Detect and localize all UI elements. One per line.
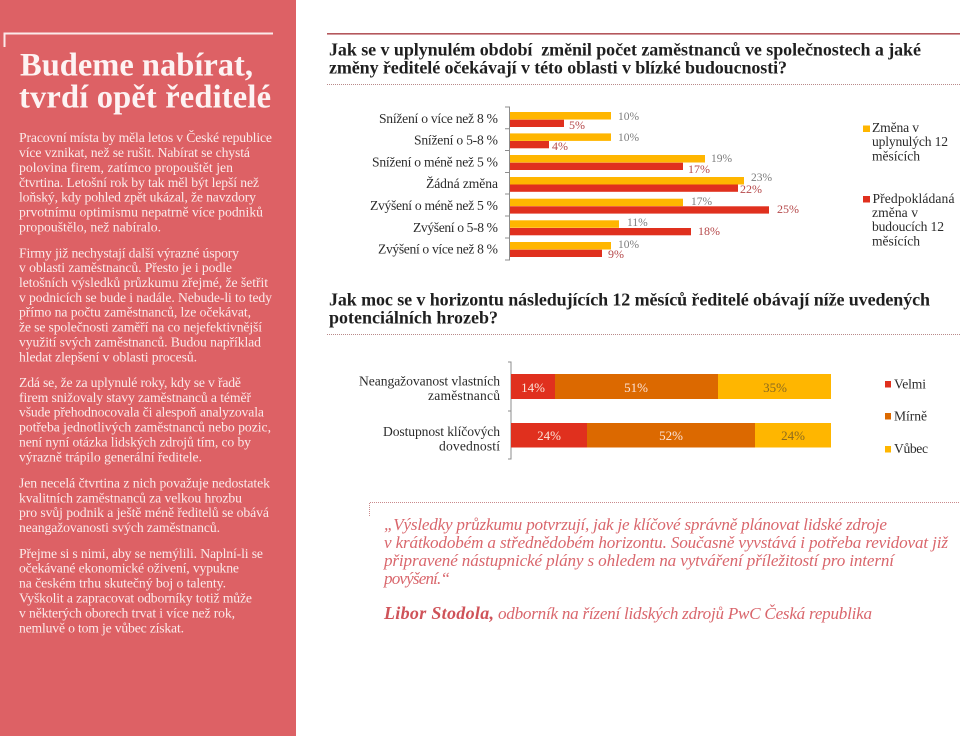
legend: change chart: Předpokládaná (872, 191, 954, 206)
chart axis (508, 362, 511, 459)
bar: dostupnost: 52% (659, 428, 683, 443)
panel: left article column (0, 0, 296, 736)
heading: change in number of employees (327, 33, 960, 84)
heading: change in number of employees: změny ředitelé očekávají v této oblasti v blízké budoucnosti? (329, 58, 787, 78)
value labels: next 12 months: 22% (740, 182, 762, 196)
category labels: Žádná změna (426, 175, 498, 191)
red bars: next 12 months (510, 120, 769, 257)
quote text: „Výsledky průzkumu potvrzují, jak je klíčové správně plánovat lidské zdroje (384, 515, 887, 534)
legend: change chart: změna v (872, 205, 918, 220)
heading: perceived threats (327, 290, 960, 334)
category labels (370, 111, 498, 256)
text block: paragraph 3: všude přehodnocovala či alespoň analyzovala (19, 404, 264, 420)
text block: paragraph 4: neangažovanosti svých zaměstnanců. (19, 520, 220, 535)
callout: expert quote (370, 502, 960, 623)
text block: paragraph 5: na českém trhu skutečný boj o talenty. (19, 576, 226, 590)
text block: paragraph 1 (19, 129, 272, 234)
text block: paragraph 5: Vyškolit a zapracovat odborníky totiž může (19, 590, 252, 606)
quote attribution: odborník na řízení lidských zdrojů PwC Česká republika (498, 604, 872, 623)
text block: paragraph 5: očekávané ekonomické oživení, vypukne (19, 560, 239, 576)
text block: paragraph 3: Zdá se, že za uplynulé roky, kdy se v řadě (19, 375, 241, 390)
text block: paragraph 4: kvalitních zaměstnanců za velkou hrozbu (19, 490, 242, 506)
value labels: next 12 months: 17% (688, 162, 710, 176)
category labels: Neangažovanost vlastních (359, 374, 500, 388)
text block: paragraph 1: loňský, kdy pohled zpět ukázal, že navzdory (19, 190, 256, 204)
text block: paragraph 2: letošních výsledků průzkumu zřejmé, že šetřit (19, 275, 268, 290)
quote attribution: Libor Stodola, (383, 603, 494, 623)
text block: paragraph 5: Přejme si s nimi, aby se nemýlili. Naplní-li se (19, 546, 263, 561)
text block: paragraph 3 (19, 375, 271, 464)
legend: change chart: uplynulých 12 (872, 134, 948, 149)
value labels: past 12 months: 10% (618, 132, 640, 144)
bar: dostupnost (511, 423, 831, 448)
title (19, 48, 271, 116)
text block: paragraph 1: propouštělo, než nabíralo. (19, 220, 161, 234)
heading: change in number of employees: Jak se v uplynulém období změnil počet zaměstnanců ve společnostech a jaké (329, 40, 921, 60)
value labels: past 12 months: 10% (618, 111, 640, 123)
text block: paragraph 1: Pracovní místa by měla letos v České republice (19, 129, 272, 145)
value labels: past 12 months: 23% (751, 172, 772, 184)
text block: paragraph 1: více vznikat, než se rušit. Nabírat se chystá (19, 145, 250, 160)
category labels: Snížení o více než 8 % (379, 111, 498, 126)
category labels: zaměstnanců (428, 388, 500, 403)
value labels: next 12 months: 25% (777, 202, 799, 216)
yellow bars: past 12 months (510, 112, 744, 250)
text block: paragraph 2: přímo na počtu zaměstnanců, lze očekávat, (19, 304, 251, 320)
legend: change chart: Změna v (872, 120, 919, 135)
value labels: next 12 months: 18% (698, 224, 720, 238)
text block: paragraph 2: v oblasti zaměstnanců. Přesto je i podle (19, 260, 232, 275)
value labels: past 12 months (618, 111, 772, 251)
text block: paragraph 2: v podnicích se bude i nadále. Nebude-li to tedy (19, 290, 272, 305)
text block: paragraph 2: využití svých zaměstnanců. Budou například (19, 334, 261, 350)
text block: paragraph 4: Jen necelá čtvrtina z nich považuje nedostatek (19, 476, 270, 490)
text block: paragraph 5 (19, 546, 263, 636)
category labels: dovedností (439, 438, 500, 454)
category labels: Snížení o 5-8 % (414, 132, 498, 148)
category labels: Zvýšení o méně než 5 % (370, 198, 498, 213)
value labels: past 12 months: 17% (691, 196, 712, 208)
bar: neangažovanost: 35% (763, 380, 787, 395)
legend: threats chart: Velmi (894, 376, 926, 392)
text block: paragraph 2: Firmy již nechystají další výrazné úspory (19, 246, 239, 260)
title: tvrdí opět ředitelé (19, 80, 271, 116)
quote text: v krátkodobém a střednědobém horizontu. Současně vyvstává i potřeba revidovat již (384, 533, 948, 552)
legend: change chart: měsících (872, 148, 920, 164)
legend: change chart: měsících (872, 234, 920, 248)
category labels (359, 374, 500, 454)
value labels: next 12 months: 5% (569, 118, 585, 132)
bar: neangažovanost: 51% (624, 380, 648, 395)
value labels: next 12 months (552, 118, 799, 261)
heading: perceived threats: potenciálních hrozeb? (329, 308, 498, 328)
legend: change chart: budoucích 12 (872, 219, 944, 234)
value labels: next 12 months: 4% (552, 139, 568, 153)
legend: change chart (863, 120, 954, 248)
text block: paragraph 1: čtvrtina. Letošní rok by tak měl být lepší než (19, 175, 259, 190)
heading: perceived threats: Jak moc se v horizontu následujících 12 měsíců ředitelé obávají níže uvedených (329, 290, 930, 310)
text block: paragraph 5: v některých oborech trvat i více než rok, (19, 606, 235, 620)
text block: paragraph 3: potřeba jednotlivých zaměstnanců nebo pozic, (19, 420, 271, 434)
bar: neangažovanost: 14% (521, 380, 545, 395)
quote text: povýšení.“ (383, 569, 450, 588)
chart axis (505, 107, 510, 260)
legend: threats chart: Vůbec (894, 441, 928, 456)
text block: paragraph 3: výrazně trápilo generální ředitele. (19, 450, 202, 464)
legend: threats chart: Mírně (894, 408, 927, 424)
quote text (383, 515, 948, 588)
text block: paragraph 1: polovina firem, zatímco propouštět jen (19, 160, 233, 175)
value labels: past 12 months: 11% (627, 217, 648, 229)
text block: paragraph 2 (19, 246, 272, 364)
value labels: past 12 months: 10% (618, 239, 640, 251)
bar: dostupnost: 24% (537, 428, 561, 443)
value labels: past 12 months: 19% (711, 153, 732, 165)
text block: paragraph 2: že se společnosti zaměří na co nejefektivnější (19, 320, 262, 334)
stacked bar chart: threats (359, 362, 831, 459)
category labels: Zvýšení o 5-8 % (413, 220, 498, 235)
bar: dostupnost: 24% (781, 428, 805, 443)
category labels: Dostupnost klíčových (383, 424, 500, 439)
text block: paragraph 3: není nyní otázka lidských zdrojů tím, co by (19, 434, 251, 450)
category labels: Snížení o méně než 5 % (372, 154, 498, 170)
category labels: Zvýšení o více než 8 % (378, 242, 498, 256)
text block: paragraph 4: pro svůj podnik a ještě méně ředitelů se obává (19, 505, 269, 520)
title: Budeme nabírat, (20, 48, 253, 84)
text block: paragraph 4 (19, 476, 270, 535)
value labels: next 12 months: 9% (608, 247, 624, 261)
text block: paragraph 1: prvotnímu optimismu nepatrně více podniků (19, 204, 263, 220)
text block: paragraph 2: hledat zlepšení v oblasti procesů. (19, 350, 197, 364)
text block: paragraph 3: firem snižovaly stavy zaměstnanců a téměř (19, 390, 251, 405)
bar: neangažovanost (511, 374, 831, 399)
quote text: připravené nástupnické plány s ohledem na vytváření příležitostí pro interní (383, 551, 896, 570)
text block: paragraph 5: nemluvě o tom je vůbec získat. (19, 620, 184, 636)
bar chart: change in employees (370, 107, 799, 261)
legend: threats chart (885, 376, 928, 456)
